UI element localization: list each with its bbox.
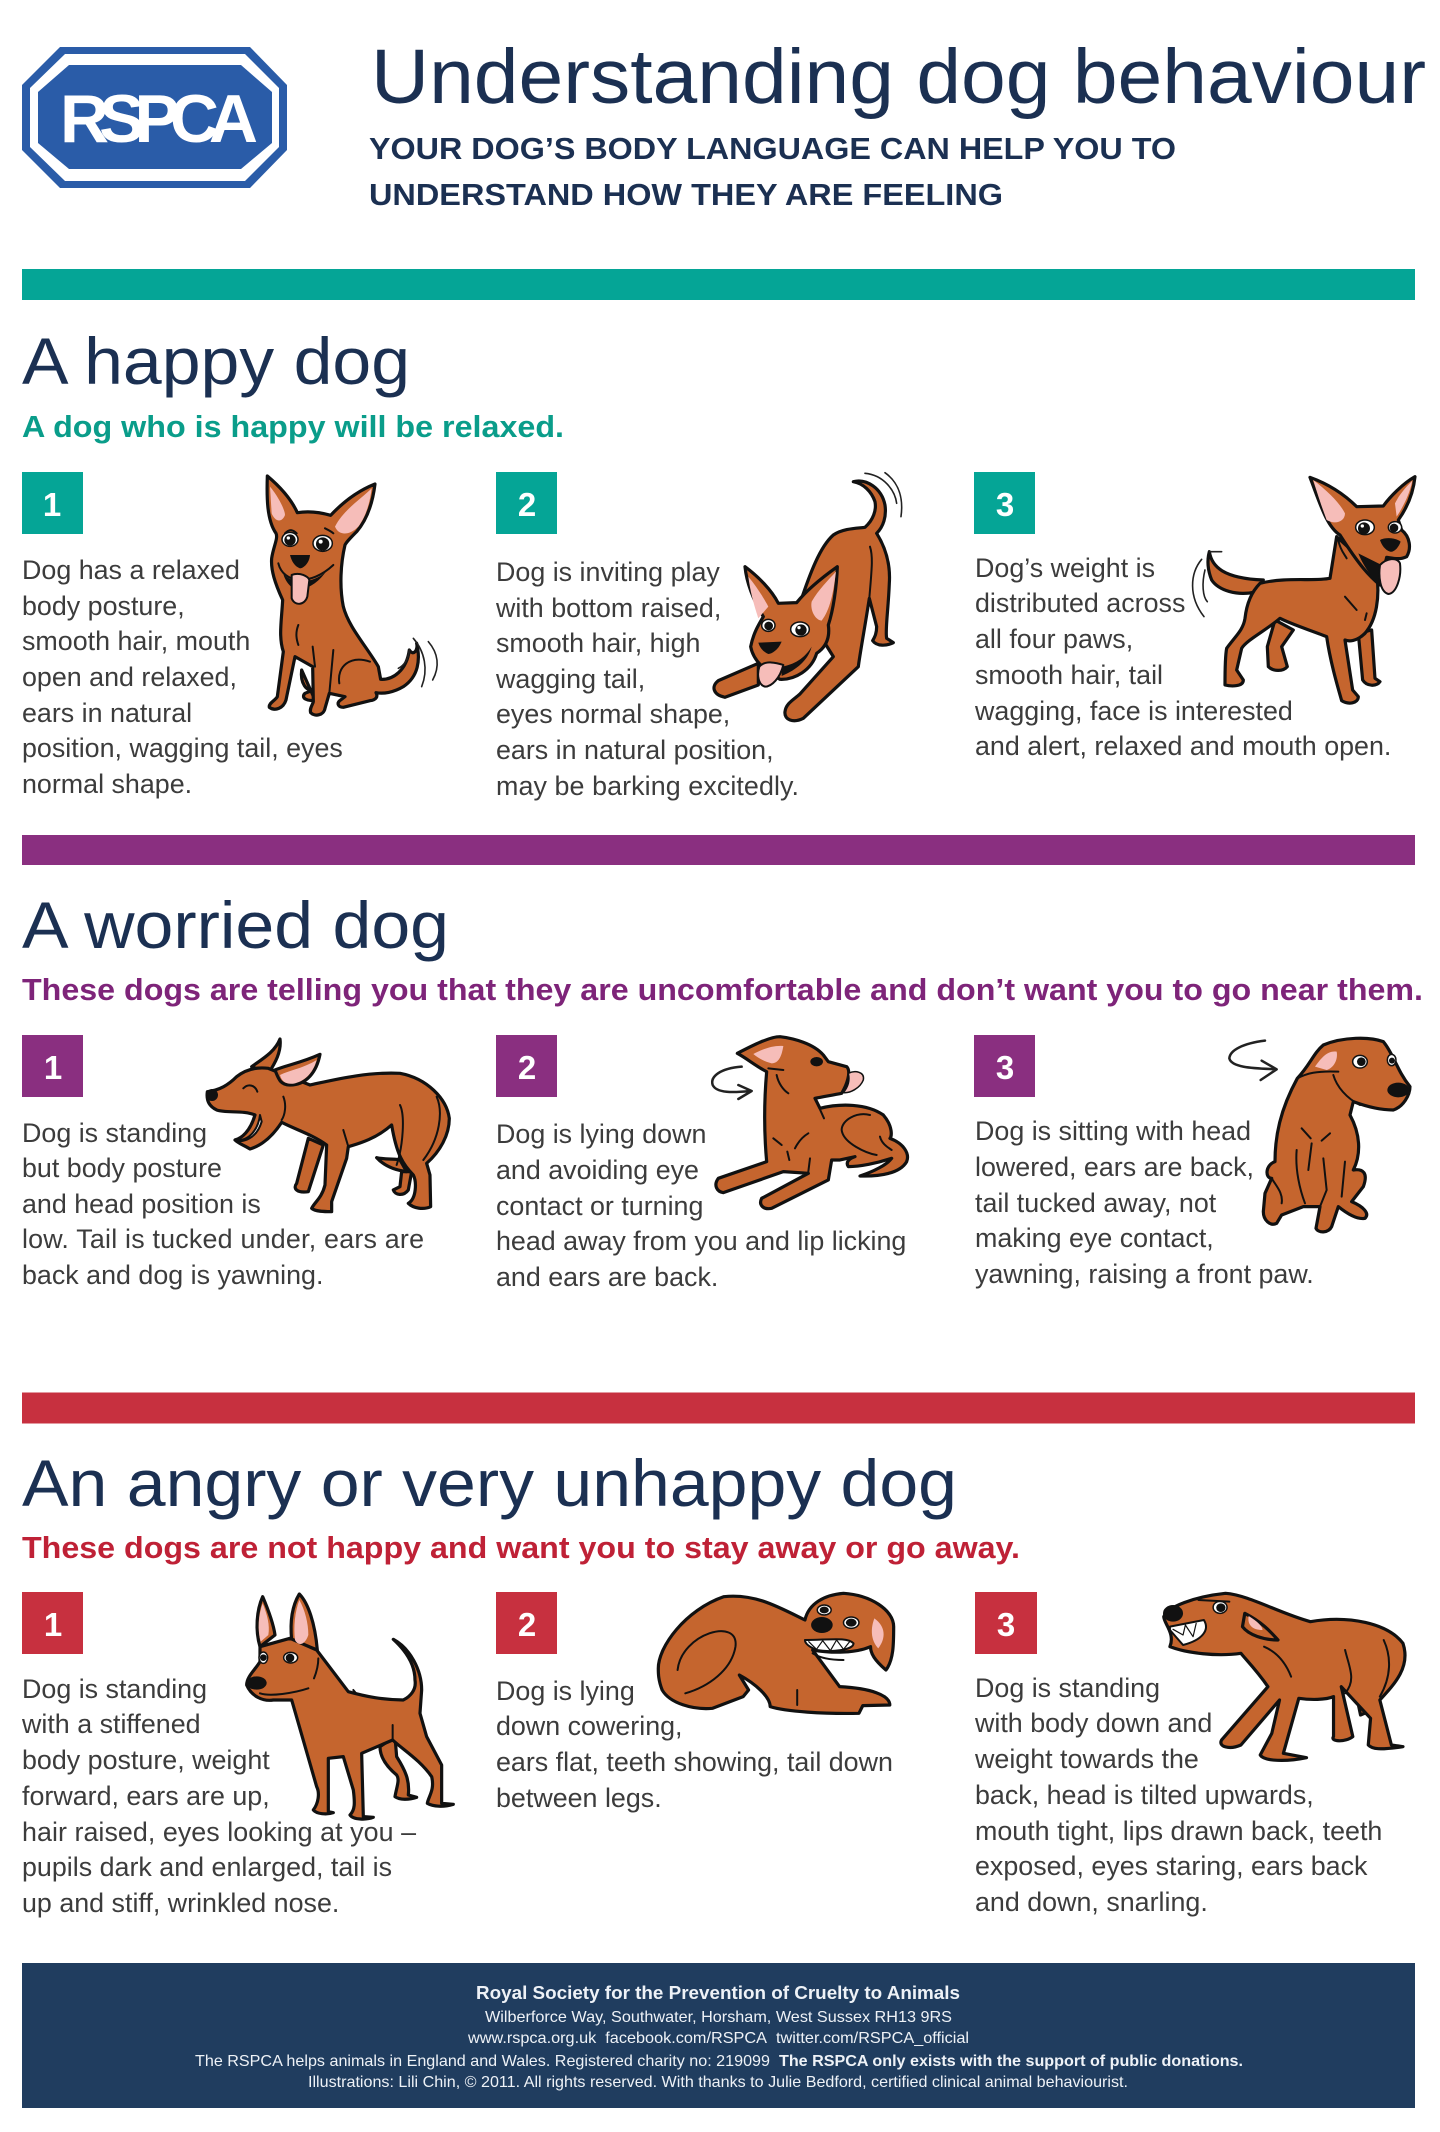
- panel: angry dog: [21, 1392, 1415, 1918]
- number badge 1: [22, 1035, 83, 1097]
- RSPCA logo: [22, 47, 287, 188]
- number badge 2: [496, 1592, 557, 1654]
- description 2: with bottom raised,: [495, 593, 721, 623]
- illustration: snarling dog: [1163, 1593, 1405, 1760]
- description 3: wagging, face is interested: [974, 696, 1293, 726]
- description 2: ears in natural position,: [496, 735, 774, 765]
- description 1: Dog is standing: [22, 1674, 207, 1704]
- subheading: happy: A dog who is happy will be relaxed.: [22, 409, 564, 444]
- description 1: ears in natural: [22, 698, 192, 728]
- header: [22, 34, 1426, 212]
- description 3: lowered, ears are back,: [975, 1152, 1254, 1182]
- illustration: standing happy dog: [1193, 477, 1415, 703]
- description 2: head away from you and lip licking: [496, 1226, 906, 1256]
- description 3: smooth hair, tail: [975, 660, 1163, 690]
- description 1: but body posture: [22, 1153, 222, 1183]
- number badge 3: [974, 1035, 1035, 1097]
- number badge 3: [974, 472, 1035, 534]
- number badge 2: 2: [518, 1049, 536, 1086]
- number badge 1: [22, 1592, 83, 1654]
- description 3: with body down and: [974, 1708, 1212, 1738]
- number badge 2: [496, 1035, 557, 1097]
- description 1: normal shape.: [22, 769, 192, 799]
- number badge 2: [496, 472, 557, 534]
- footer address: Wilberforce Way, Southwater, Horsham, West Sussex RH13 9RS: [485, 2009, 952, 2026]
- illustration: happy sitting dog: [267, 476, 437, 715]
- footer: [22, 1963, 1415, 2108]
- description 2: Dog is lying down: [496, 1119, 706, 1149]
- footer organisation name: Royal Society for the Prevention of Cruelty to Animals: [476, 1983, 960, 2003]
- description 1: position, wagging tail, eyes: [22, 733, 343, 763]
- description 3: exposed, eyes staring, ears back: [975, 1851, 1368, 1881]
- heading: angry: An angry or very unhappy dog: [22, 1446, 957, 1520]
- title: Understanding dog behaviour: [371, 34, 1426, 120]
- description 1: up and stiff, wrinkled nose.: [22, 1888, 339, 1918]
- description 2: may be barking excitedly.: [496, 771, 799, 801]
- illustration: yawning dog: [206, 1039, 449, 1212]
- description 3: and down, snarling.: [975, 1887, 1208, 1917]
- description 3: Dog’s weight is: [975, 553, 1155, 583]
- description 3: distributed across: [975, 588, 1185, 618]
- RSPCA logo: RSPCA: [60, 81, 257, 157]
- description 2: between legs.: [496, 1783, 662, 1813]
- description 1: pupils dark and enlarged, tail is: [22, 1852, 392, 1882]
- description 3: and alert, relaxed and mouth open.: [975, 731, 1391, 761]
- description 2: and avoiding eye: [496, 1155, 699, 1185]
- number badge 2: 2: [518, 1606, 536, 1643]
- number badge 3: 3: [996, 1049, 1014, 1086]
- illustration: play bow dog: [714, 473, 902, 721]
- description 3: tail tucked away, not: [975, 1188, 1217, 1218]
- footer web links: www.rspca.org.uk facebook.com/RSPCA twitter.com/RSPCA_official: [467, 2030, 969, 2047]
- description 1: low. Tail is tucked under, ears are: [22, 1224, 424, 1254]
- number badge 3: 3: [997, 1606, 1015, 1643]
- description 3: weight towards the: [974, 1744, 1199, 1774]
- subtitle: UNDERSTAND HOW THEY ARE FEELING: [369, 177, 1003, 212]
- description 1: open and relaxed,: [22, 662, 237, 692]
- description 3: Dog is sitting with head: [975, 1116, 1251, 1146]
- description 3: Dog is standing: [975, 1673, 1160, 1703]
- description 1: back and dog is yawning.: [22, 1260, 323, 1290]
- description 2: Dog is lying: [496, 1676, 635, 1706]
- number badge 1: 1: [44, 1606, 62, 1643]
- description 1: Dog has a relaxed: [22, 555, 240, 585]
- heading: a happy dog: A happy dog: [22, 324, 410, 398]
- description 1: with a stiffened: [21, 1709, 201, 1739]
- footer charity information: The RSPCA helps animals in England and Wales. Registered charity no: 219099: [195, 2053, 770, 2070]
- description 1: Dog is standing: [22, 1118, 207, 1148]
- illustration: stiff standing dog: [247, 1594, 453, 1819]
- number badge 1: 1: [43, 486, 61, 523]
- description 2: smooth hair, high: [496, 628, 700, 658]
- panel: happy dog: [22, 269, 1415, 801]
- subheading: angry: These dogs are not happy and want you to stay away or go away.: [22, 1530, 1020, 1565]
- description 2: ears flat, teeth showing, tail down: [496, 1747, 893, 1777]
- number badge 3: 3: [996, 486, 1014, 523]
- description 1: hair raised, eyes looking at you –: [22, 1817, 416, 1847]
- heading: a worried dog: A worried dog: [22, 888, 449, 962]
- number badge 1: [22, 472, 83, 534]
- description 1: body posture, weight: [22, 1745, 270, 1775]
- description 1: and head position is: [22, 1189, 261, 1219]
- description 2: eyes normal shape,: [496, 699, 730, 729]
- footer credits: Illustrations: Lili Chin, © 2011. All rights reserved. With thanks to Julie Bedford, certified clinical animal behaviourist.: [308, 2074, 1128, 2091]
- description 3: back, head is tilted upwards,: [975, 1780, 1314, 1810]
- number badge 1: 1: [44, 1049, 62, 1086]
- description 1: forward, ears are up,: [22, 1781, 270, 1811]
- illustration: sitting dog head lowered: [1229, 1038, 1410, 1232]
- description 2: down cowering,: [496, 1711, 683, 1741]
- subheading: worried: These dogs are telling you that they are uncomfortable and don’t want you to go near them.: [22, 972, 1423, 1007]
- footer charity information: [195, 2053, 1243, 2070]
- illustration: lying dog looking away: [712, 1037, 907, 1209]
- description 3: all four paws,: [975, 624, 1133, 654]
- footer charity information: The RSPCA only exists with the support of public donations.: [779, 2053, 1243, 2070]
- description 2: contact or turning: [496, 1191, 703, 1221]
- number badge 2: 2: [518, 486, 536, 523]
- description 2: wagging tail,: [495, 664, 645, 694]
- panel: worried dog: [22, 835, 1423, 1292]
- description 3: mouth tight, lips drawn back, teeth: [975, 1816, 1382, 1846]
- subtitle: YOUR DOG’S BODY LANGUAGE CAN HELP YOU TO: [369, 131, 1176, 166]
- description 3: making eye contact,: [975, 1223, 1214, 1253]
- description 2: Dog is inviting play: [496, 557, 720, 587]
- description 3: yawning, raising a front paw.: [975, 1259, 1314, 1289]
- number badge 3: [975, 1592, 1037, 1654]
- description 1: smooth hair, mouth: [22, 626, 250, 656]
- description 2: and ears are back.: [496, 1262, 718, 1292]
- description 1: body posture,: [22, 591, 185, 621]
- illustration: cowering dog: [658, 1593, 894, 1713]
